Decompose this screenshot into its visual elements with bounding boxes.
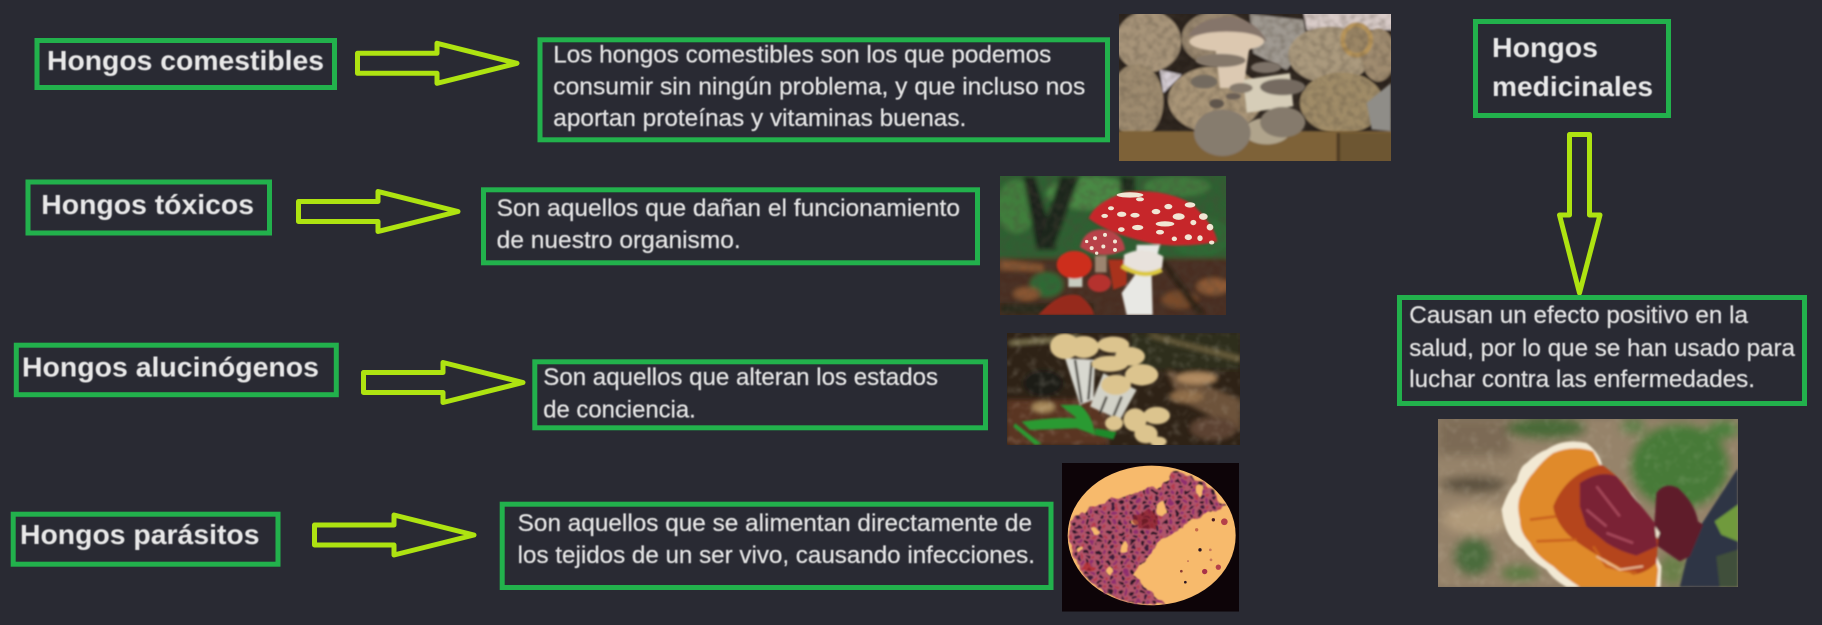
- image: clustered tan mushrooms on forest floor: [1007, 333, 1240, 445]
- text block: alucinógenos description: Son aquellos que alteran los estados: [543, 364, 938, 391]
- text block: tóxicos description: [484, 190, 978, 263]
- arrow: parásitos to description: [314, 515, 474, 555]
- heading: Hongos medicinales: Hongos: [1492, 32, 1598, 63]
- heading: Hongos parásitos: [13, 514, 278, 564]
- texture: [1007, 333, 1240, 445]
- image: oyster mushrooms on substrate sacks: [1119, 14, 1391, 161]
- arrow: alucinógenos to description: [364, 362, 523, 402]
- heading: Hongos medicinales: [1476, 22, 1668, 116]
- heading: Hongos tóxicos: Hongos tóxicos: [41, 189, 254, 220]
- heading: Hongos alucinógenos: Hongos alucinógenos: [22, 352, 319, 383]
- image: microscope view of parasitic cells: [1062, 463, 1239, 612]
- text block: medicinales description: Causan un efecto positivo en la: [1409, 302, 1749, 329]
- heading: Hongos comestibles: [37, 40, 334, 88]
- arrow: tóxicos to description: [298, 192, 458, 232]
- heading: Hongos medicinales: medicinales: [1492, 71, 1653, 102]
- text block: medicinales description: salud, por lo que se han usado para: [1409, 335, 1796, 362]
- text block: tóxicos description: Son aquellos que dañan el funcionamiento: [497, 195, 960, 222]
- text block: alucinógenos description: [535, 362, 986, 428]
- text block: parásitos description: [502, 504, 1051, 588]
- text block: comestibles description: [540, 40, 1108, 140]
- arrow: comestibles to description: [358, 43, 517, 83]
- heading: Hongos comestibles: Hongos comestibles: [47, 45, 324, 76]
- text block: comestibles description: Los hongos comestibles son los que podemos: [553, 41, 1051, 68]
- text block: comestibles description: aportan proteínas y vitaminas buenas.: [553, 105, 966, 132]
- image: red fly agaric mushrooms: [1000, 176, 1226, 315]
- texture: [1119, 14, 1391, 161]
- heading: Hongos parásitos: Hongos parásitos: [20, 519, 260, 550]
- heading: Hongos alucinógenos: [16, 345, 336, 395]
- heading: Hongos tóxicos: [28, 182, 270, 233]
- arrow: medicinales to description: [1560, 134, 1600, 293]
- text block: tóxicos description: de nuestro organismo.: [497, 227, 741, 254]
- texture: [1000, 176, 1226, 315]
- text block: alucinógenos description: de conciencia.: [543, 397, 696, 424]
- image: reishi medicinal mushroom on trunk: [1438, 419, 1738, 587]
- text block: parásitos description: los tejidos de un ser vivo, causando infecciones.: [518, 542, 1035, 569]
- text block: comestibles description: consumir sin ningún problema, y que incluso nos: [553, 73, 1085, 100]
- text block: medicinales description: luchar contra las enfermedades.: [1409, 366, 1755, 393]
- text block: medicinales description: [1400, 298, 1804, 404]
- texture: [1438, 419, 1738, 587]
- text block: parásitos description: Son aquellos que se alimentan directamente de: [518, 510, 1032, 537]
